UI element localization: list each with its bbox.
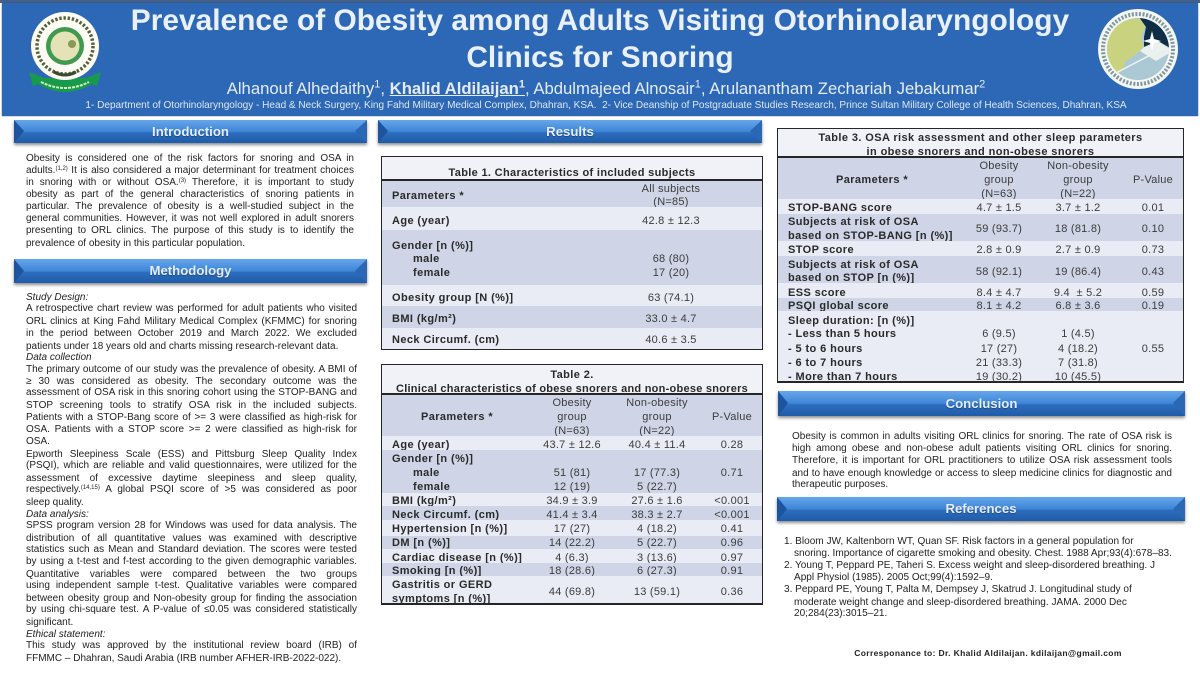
row: hypertension: Hypertension [n (%)] <box>392 523 508 535</box>
ethical statement: FFMMC – Dhahran, Saudi Arabia (IRB number AFHER-IRB-2022-022). <box>26 652 341 664</box>
row: sleep duration: - 5 to 6 hours <box>788 343 863 355</box>
row: age: 43.7 ± 12.6 <box>543 439 601 451</box>
row: age: Age (year) <box>392 215 450 227</box>
data collection: The primary outcome of our study was the prevalence of obesity. A BMI of <box>26 364 357 374</box>
table 1 title <box>382 157 762 181</box>
text block: introduction: general communities. However, it was not well explored in adult snorers <box>26 212 354 224</box>
sleep questionnaires: assessment of excessive daytime sleepiness and sleep quality, <box>26 472 357 484</box>
row: sleep duration: - 6 to 7 hours <box>788 357 863 369</box>
data collection: assessment of OSA risk in this snoring cohort using the STOP-BANG and <box>26 386 357 398</box>
row: PSQI global score: 8.1 ± 4.2 <box>976 300 1021 312</box>
row: STOP-BANG score: STOP-BANG score <box>788 202 892 214</box>
text block: introduction: obesity as part of the general characteristics of snoring patients in <box>26 188 354 200</box>
table 2 header: (N=63) <box>554 425 590 437</box>
top edge strip <box>0 0 1200 3</box>
row: risk by STOP-BANG: based on STOP-BANG [n (%)] <box>788 230 953 242</box>
text block: introduction: Obesity is considered one of the risk factors for snoring and OSA in <box>26 152 354 164</box>
row: risk by STOP: 58 (92.1) <box>976 266 1022 278</box>
row: age <box>382 207 762 230</box>
header banner <box>2 3 1198 116</box>
data analysis: Quantitative variables were compared between the two groups <box>26 568 357 580</box>
row: gender <box>382 450 762 493</box>
table 2 title: Table 2. <box>550 369 594 381</box>
data analysis: statistics such as Mean and Standard deviation. The scores were tested <box>26 544 357 554</box>
row: neck circumference: 40.6 ± 3.5 <box>645 334 697 346</box>
table 3 title <box>778 129 1183 158</box>
row: sleep duration: 4 (18.2) <box>1058 343 1098 355</box>
table 3 header: Parameters * <box>836 174 908 186</box>
data collection: Patients with a STOP-Bang score of >= 3 were classified as high-risk for <box>26 412 357 422</box>
row: STOP-BANG score: 3.7 ± 1.2 <box>1056 202 1100 214</box>
table 2 header: group <box>557 411 587 423</box>
authors: Alhanouf Alhedaithy1, Khalid Aldilaijan1, Abdulmajeed Alnosair1, Arulanantham Zechariah Jebakumar2 <box>227 78 985 98</box>
text block: introduction: in snoring with or without OSA.(3) Therefore, it is important to study <box>26 176 354 188</box>
study design: ORL clinics at King Fahd Military Medical Complex (KFMMC) for snoring <box>26 316 357 326</box>
text block: introduction: prevalence of obesity in this particular population. <box>26 238 245 248</box>
row: DM: DM [n (%)] <box>392 537 450 549</box>
study design: A retrospective chart review was performed for adult patients who visited <box>26 302 357 314</box>
row: sleep duration <box>778 311 1183 381</box>
table 3 header: Obesity <box>979 160 1019 172</box>
row: cardiac disease <box>382 549 762 563</box>
data analysis: by using chi-square test. A P-value of ≤0.05 was considered statistically <box>26 604 357 614</box>
text block: introduction: adults.(1,2) It is also considered a major determinant for treatment choices <box>26 164 354 176</box>
row: age: 40.4 ± 11.4 <box>629 439 685 451</box>
reference 1 <box>784 536 1172 558</box>
row: ESS score: ESS score <box>788 287 846 299</box>
text block: introduction: particular. The prevalence of obesity is a well-studied subject in the <box>26 200 354 212</box>
data collection: ≥ 30 was considered as obesity. The secondary outcome was the <box>26 376 357 386</box>
row: sleep duration: 7 (31.8) <box>1058 357 1098 369</box>
reference 2: Appl Physiol (1985). 2005 Oct;99(4):1592–9. <box>794 572 993 582</box>
row: risk by STOP: 0.43 <box>1142 266 1164 278</box>
row: BMI: BMI (kg/m²) <box>392 495 456 507</box>
row: STOP score: STOP score <box>788 244 854 256</box>
row: sleep duration: 21 (33.3) <box>976 357 1022 369</box>
data collection: STOP screening tools to stratify OSA risk in the included subjects. <box>26 400 357 410</box>
data collection: OSA. Patients with a STOP score >= 2 were classified as high-risk for <box>26 424 357 434</box>
data analysis: distribution of all quantitative values was examined with descriptive <box>26 532 357 544</box>
table 3 header: (N=63) <box>981 188 1017 200</box>
text block: conclusion: Obesity is common in adults visiting ORL clinics for snoring. The rate of OSA risk is <box>792 430 1172 442</box>
study design: patients under 18 years old and charts missing research-relevant data. <box>26 340 338 352</box>
row: STOP-BANG score <box>778 199 1183 214</box>
row: hypertension: 0.41 <box>721 523 743 535</box>
row: neck circumference: Neck Circumf. (cm) <box>392 509 499 521</box>
row: neck circumference: 41.4 ± 3.4 <box>546 509 598 521</box>
data analysis: between obesity group and Non-obesity group for finding the association <box>26 592 357 604</box>
row: cardiac disease: 3 (13.6) <box>637 552 677 564</box>
row: smoking: 0.91 <box>721 565 743 577</box>
table 3: OSA risk assessment and sleep parameters <box>778 129 1183 382</box>
reference 1: snoring. Importance of cigarette smoking and obesity. Chest. 1988 Apr;93(4):678–83. <box>794 548 1172 558</box>
row: sleep duration: 17 (27) <box>981 343 1017 355</box>
table 3 title: in obese snorers and non-obese snorers <box>867 146 1094 158</box>
data analysis: Data analysis: <box>26 508 89 520</box>
table 2 header: P-Value <box>712 411 752 423</box>
title: Prevalence of Obesity among Adults Visiting Otorhinolaryngology <box>131 4 1069 37</box>
row: STOP-BANG score: 0.01 <box>1142 202 1164 214</box>
table 2 header: Non-obesity <box>626 397 688 409</box>
data analysis: by using a t-test and f-test according to the given demographic variables. <box>26 556 357 566</box>
section heading: References: References <box>945 501 1017 516</box>
row: gastritis or GERD: 44 (69.8) <box>549 586 595 598</box>
row: cardiac disease: 0.97 <box>721 552 743 564</box>
data collection: Data collection <box>26 352 92 362</box>
row: ESS score <box>778 283 1183 298</box>
table 2 header: Obesity <box>552 397 592 409</box>
reference 1: 1. Bloom JW, Kaltenborn WT, Quan SF. Risk factors in a general population for <box>784 536 1134 546</box>
table 1 header: Parameters * <box>392 190 464 202</box>
section heading: References <box>777 497 1185 521</box>
row: hypertension: 4 (18.2) <box>637 523 677 535</box>
table 2 title: Clinical characteristics of obese snorers and non-obese snorers <box>396 383 748 395</box>
row: gender: male <box>413 253 440 265</box>
row: STOP-BANG score: 4.7 ± 1.5 <box>976 202 1021 214</box>
text block: conclusion: therapeutic purposes. <box>792 478 888 490</box>
text block: references <box>784 536 1172 618</box>
row: BMI: 27.6 ± 1.6 <box>631 495 683 507</box>
row: ESS score: 8.4 ± 4.7 <box>976 287 1021 299</box>
table 1 header: (N=85) <box>653 196 689 208</box>
row: gender: female <box>413 481 450 493</box>
data analysis: SPSS program version 28 for Windows was used for data analysis. The <box>26 520 357 530</box>
row: BMI: 33.0 ± 4.7 <box>645 313 697 325</box>
reference 3 <box>784 584 1132 618</box>
row: sleep duration: 0.55 <box>1142 343 1164 355</box>
row: gender: 17 (77.3) <box>634 467 680 479</box>
reference 2: 2. Young T, Peppard PE, Taheri S. Excess weight and sleep-disordered breathing. J <box>784 560 1155 570</box>
data analysis: significant. <box>26 616 73 628</box>
row: risk by STOP: based on STOP [n (%)] <box>788 272 915 284</box>
row: DM: 14 (22.2) <box>549 537 595 549</box>
row: gender: female <box>413 267 450 279</box>
row: risk by STOP-BANG <box>778 214 1183 241</box>
row: hypertension: 17 (27) <box>554 523 590 535</box>
row: neck circumference: Neck Circumf. (cm) <box>392 334 499 346</box>
sleep questionnaires: sleep quality. <box>26 496 84 508</box>
data analysis: using independent sample t-test. Qualitative variables were compared <box>26 580 357 590</box>
row: sleep duration: - Less than 5 hours <box>788 328 896 340</box>
row: obesity group: 63 (74.1) <box>648 292 694 304</box>
correspondence line: Corresponance to: Dr. Khalid Aldilaijan. kdilaijan@gmail.com <box>854 648 1122 658</box>
table 3 header: (N=22) <box>1060 188 1096 200</box>
table 3 title: Table 3. OSA risk assessment and other sleep parameters <box>818 132 1143 144</box>
row: DM <box>382 536 762 549</box>
section heading: Introduction <box>14 120 367 143</box>
row: gender: 68 (80) <box>653 253 689 265</box>
row: smoking: Smoking [n (%)] <box>392 565 482 577</box>
row: gender: male <box>413 467 440 479</box>
row: gender <box>382 230 762 285</box>
row: age: 42.8 ± 12.3 <box>642 215 700 227</box>
table 3 header: Non-obesity <box>1047 160 1109 172</box>
study design: in the period between October 2019 and March 2022. We excluded <box>26 328 357 338</box>
row: sleep duration: 6 (9.5) <box>982 328 1016 340</box>
row: ESS score: 9.4 ± 5.2 <box>1054 287 1102 299</box>
table 2: clinical characteristics <box>382 365 762 604</box>
row: risk by STOP: Subjects at risk of OSA <box>788 259 919 271</box>
table 1 title: Table 1. Characteristics of included subjects <box>449 167 695 179</box>
ethical statement: This study was approved by the institutional review board (IRB) of <box>26 640 357 650</box>
row: risk by STOP-BANG: 18 (81.8) <box>1055 223 1101 235</box>
row: obesity group <box>382 285 762 306</box>
study design <box>26 292 357 352</box>
text block: conclusion: and to have enough knowledge or access to sleep medicine clinics for diagnostic and <box>792 468 1172 478</box>
row: age: Age (year) <box>392 439 450 451</box>
row: STOP score <box>778 241 1183 256</box>
text block: conclusion: Therefore, it is important for ORL practitioners to utilize OSA risk assessment tools <box>792 454 1172 466</box>
row: risk by STOP <box>778 256 1183 283</box>
table 1: characteristics of included subjects <box>382 157 762 349</box>
row: STOP score: 2.8 ± 0.9 <box>976 244 1021 256</box>
table 2 header: (N=22) <box>639 425 675 437</box>
row: neck circumference: <0.001 <box>714 509 750 521</box>
row: BMI <box>382 493 762 506</box>
row: STOP score: 2.7 ± 0.9 <box>1056 244 1100 256</box>
reference 3: 20;284(23):3015–21. <box>794 608 887 618</box>
row: risk by STOP: 19 (86.4) <box>1055 266 1101 278</box>
row: gender: Gender [n (%)] <box>392 240 473 252</box>
section heading: Introduction: Introduction <box>152 124 229 139</box>
row: BMI: <0.001 <box>714 495 750 507</box>
section heading: Conclusion: Conclusion <box>946 396 1017 411</box>
row: BMI <box>382 306 762 328</box>
row: risk by STOP-BANG: Subjects at risk of OSA <box>788 216 919 228</box>
row: ESS score: 0.59 <box>1142 287 1164 299</box>
row: gender: 51 (81) <box>554 467 590 479</box>
row: age <box>382 436 762 450</box>
row: PSQI global score: 0.19 <box>1142 300 1164 312</box>
icon: Saudi Otorhinolaryngology Society logo <box>1098 9 1178 89</box>
row: smoking <box>382 563 762 576</box>
row: gender: 17 (20) <box>653 267 689 279</box>
row: cardiac disease: Cardiac disease [n (%)] <box>392 552 522 564</box>
table 1 header: All subjects <box>642 183 700 195</box>
row: sleep duration: 1 (4.5) <box>1061 328 1095 340</box>
row: gastritis or GERD: Gastritis or GERD <box>392 579 492 591</box>
row: gender: 0.71 <box>721 467 743 479</box>
icon: King Fahd Military Medical Complex logo <box>29 12 101 92</box>
table 1 header <box>382 181 762 207</box>
table 2 header <box>382 395 762 436</box>
section heading: Conclusion <box>778 391 1185 416</box>
section heading: Results <box>378 120 762 143</box>
row: STOP score: 0.73 <box>1142 244 1164 256</box>
section heading: Methodology <box>14 259 367 283</box>
table 2 title <box>382 365 762 395</box>
section heading: Methodology: Methodology <box>149 263 232 278</box>
row: BMI: BMI (kg/m²) <box>392 313 456 325</box>
table 2 header: group <box>642 411 672 423</box>
ethical statement <box>26 628 358 664</box>
title: Clinics for Snoring <box>466 41 734 74</box>
study design: Study Design: <box>26 292 88 302</box>
data collection <box>26 352 358 446</box>
title <box>131 4 1069 74</box>
row: risk by STOP-BANG: 59 (93.7) <box>976 223 1022 235</box>
row: neck circumference: 38.3 ± 2.7 <box>631 509 683 521</box>
reference 2 <box>784 560 1155 582</box>
reference 3: moderate weight change and sleep-disordered breathing. JAMA. 2000 Dec <box>794 596 1127 608</box>
row: hypertension <box>382 520 762 536</box>
sleep questionnaires <box>26 448 357 508</box>
row: gastritis or GERD <box>382 576 762 603</box>
table 3 header: group <box>1063 174 1093 186</box>
row: age: 0.28 <box>721 439 743 451</box>
table 3 header: group <box>984 174 1014 186</box>
row: gender: 5 (22.7) <box>637 481 677 493</box>
text block: conclusion <box>792 430 1172 490</box>
table 3 header <box>778 158 1183 199</box>
data collection: OSA. <box>26 436 50 446</box>
sleep questionnaires: (PSQI), which are reliable and valid questionnaires, were utilized for the <box>26 460 357 470</box>
ethical statement: Ethical statement: <box>26 628 105 640</box>
row: smoking: 18 (28.6) <box>549 565 595 577</box>
section heading: Results: Results <box>546 124 594 139</box>
sleep questionnaires: respectively.(14,15) A global PSQI score of >5 was considered as poor <box>26 484 357 494</box>
row: gastritis or GERD: 13 (59.1) <box>634 586 680 598</box>
reference 3: 3. Peppard PE, Young T, Palta M, Dempsey J, Skatrud J. Longitudinal study of <box>784 584 1132 594</box>
row: smoking: 6 (27.3) <box>637 565 677 577</box>
row: gender: 12 (19) <box>554 481 590 493</box>
row: gender: Gender [n (%)] <box>392 453 473 465</box>
row: risk by STOP-BANG: 0.10 <box>1142 223 1164 235</box>
affiliations: 1- Department of Otorhinolaryngology - Head & Neck Surgery, King Fahd Military Medical Complex, Dhahran, KSA. 2- Vice Deanship of Postgraduate Studies Research, Prince Sultan Military College of Health Sciences, Dhahran, KSA <box>85 100 1127 111</box>
row: neck circumference <box>382 328 762 349</box>
row: cardiac disease: 4 (6.3) <box>555 552 589 564</box>
row: PSQI global score: PSQI global score <box>788 300 889 312</box>
text block: introduction <box>26 152 354 248</box>
row: sleep duration: Sleep duration: [n (%)] <box>788 315 915 327</box>
row: gastritis or GERD: 0.36 <box>721 586 743 598</box>
row: PSQI global score <box>778 298 1183 311</box>
data analysis <box>26 508 357 628</box>
sleep questionnaires: Epworth Sleepiness Scale (ESS) and Pittsburg Sleep Quality Index <box>26 448 357 460</box>
row: obesity group: Obesity group [N (%)] <box>392 292 513 304</box>
text block: methodology <box>26 292 358 664</box>
row: PSQI global score: 6.8 ± 3.6 <box>1056 300 1100 312</box>
text block: conclusion: high among obese and non-obese adult patients visiting ORL clinics for snoring. <box>792 442 1172 454</box>
table 2 header: Parameters * <box>421 411 493 423</box>
table 3 header: P-Value <box>1133 174 1173 186</box>
row: DM: 0.96 <box>721 537 743 549</box>
text block: introduction: presenting to ORL clinics. The purpose of this study is to identify the <box>26 224 354 236</box>
row: BMI: 34.9 ± 3.9 <box>546 495 598 507</box>
row: neck circumference <box>382 506 762 520</box>
row: DM: 5 (22.7) <box>637 537 677 549</box>
